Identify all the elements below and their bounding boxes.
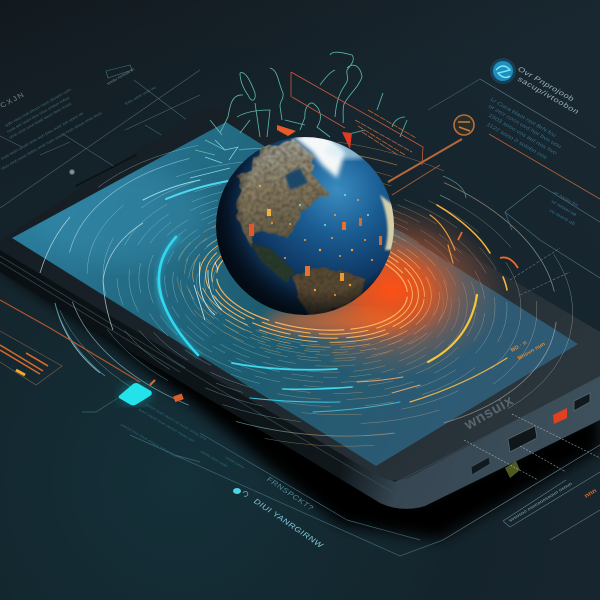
arc: cyan left core: [159, 237, 198, 355]
panel: lower right caption: [443, 445, 600, 540]
text line five: rnost uenv: [224, 455, 247, 470]
icon: cyan globe badge: [490, 58, 516, 84]
screen glows: [30, 165, 210, 265]
orange glow: [277, 202, 507, 378]
phone body side: [0, 248, 600, 509]
arc: yellow edge: [503, 277, 507, 290]
continent: north america: [236, 138, 328, 246]
glow: cyan top left: [30, 165, 210, 265]
beam two: [392, 165, 440, 195]
icon: orange marker: [150, 380, 184, 402]
yellow mark: [16, 370, 25, 375]
port: red: [553, 408, 567, 424]
orange bars: [0, 345, 48, 374]
text block: note three: 1503 sooo vos aut nos hvo: [487, 113, 558, 156]
continent: south america: [293, 267, 367, 316]
bottom frame lines: [130, 433, 443, 556]
subheading: top right: sacup/ivtoobon: [516, 75, 581, 116]
text block: long left caption three: rnos tuen voust nrse oun tnsv ouer snt uoes ntr: [0, 111, 85, 161]
connector: button stem: [82, 398, 118, 412]
city lights: [249, 185, 382, 296]
button: cyan glow: [118, 383, 153, 405]
arc: cyan left glow: [158, 238, 198, 355]
port: usb right: [574, 393, 590, 411]
orange shard: [277, 125, 296, 136]
arc: cyan top two: [143, 180, 200, 200]
port: usb small: [471, 457, 490, 475]
text block: note one: Lr Cuca blaot rsvt BrN fcu: [489, 97, 557, 138]
teal ticks: [55, 303, 105, 376]
arc: cyan bottom two: [283, 387, 352, 389]
frame lines: [443, 445, 600, 540]
speaker slot: [76, 155, 136, 186]
text block: small label: snotu renvos tn: [106, 67, 136, 86]
cloud: white haze: [326, 142, 364, 161]
label: orange tag: nnn: [583, 488, 598, 499]
red shard: [342, 132, 352, 149]
label line one: BD · n: [510, 340, 529, 354]
label line two: Bhsvn nun: [517, 341, 547, 362]
panel: bottom caption: [233, 475, 326, 550]
text block: left description three: orne vtns onur tnsd oeun tsnv rnuot: [8, 101, 73, 140]
heading: top right title: Ovr Pnprojoob: [516, 65, 576, 103]
arc: cyan bottom: [232, 363, 337, 370]
panel: top right heading: [490, 58, 581, 116]
text block: lower right caption: sososoo osonooosooun osoun: [508, 481, 573, 523]
limb shade: [216, 137, 394, 315]
lake: [285, 168, 308, 190]
background dark corner: [0, 0, 600, 320]
arc: cyan bottom four: [313, 402, 400, 412]
ripple rings: [33, 109, 591, 475]
orange line: [0, 300, 140, 382]
frame outline: [291, 72, 423, 165]
connector lines: top right: [428, 79, 600, 295]
text block: left description: sdfn ntuo rnsl otnun nson dunetn ovtn: [4, 87, 73, 128]
text block: long left caption: ntou rsnt nuoe sntvu onst ruen soutn rvon stnuo enrs tnou: [0, 110, 103, 171]
connector: green plug: [505, 461, 520, 478]
text block: lower right notes: [548, 190, 580, 227]
text block: centre label: tnsu oenr vnst uo: [124, 85, 157, 106]
near globe hot rings: [194, 262, 222, 320]
arc: cyan bottom three: [250, 398, 340, 402]
ports: [471, 393, 590, 478]
text line two: tuen voust nrse ounsn vouer nst: [137, 407, 196, 443]
phone bezel: [0, 106, 600, 480]
ice: polar cap: [292, 132, 345, 178]
orange beam: [388, 139, 462, 182]
dotted leader lines: [464, 414, 600, 480]
panel: top left notes: [0, 67, 157, 171]
arc: yellow upper: [437, 205, 490, 253]
text line three: uoesn trvs ntuo ensun rotua nost: [119, 422, 180, 459]
side edge highlight lines: [0, 256, 600, 492]
phone screen: [12, 122, 578, 466]
connector lines: top left: [0, 65, 200, 208]
text line one: nrnso tusn ouen rst nuoe sntvu ons: [144, 402, 208, 441]
icon: orange coin: [454, 115, 474, 135]
arc: yellow right: [428, 295, 477, 362]
land: right limb: [379, 194, 394, 252]
text line one: or rvusu bn: [552, 190, 580, 208]
arc: orange lower: [357, 377, 420, 393]
button: cyan: [119, 383, 152, 405]
heading: caption one: FRNSPCKT?: [265, 475, 316, 512]
network squiggles: [195, 52, 407, 155]
globe: [216, 132, 400, 316]
box outline: [0, 331, 62, 385]
white left arcs: [40, 217, 143, 373]
heading: caption two: DIUI YANRGIRNW: [252, 497, 326, 550]
ocean: [216, 137, 394, 315]
continent: central america: [250, 243, 295, 282]
text block: note four: 1122 sooo 0 solobn oos: [485, 122, 548, 161]
logo on phone bezel: wnsuix: [461, 392, 517, 434]
panel: bottom left data: [0, 300, 140, 385]
phone shadow: [0, 255, 600, 540]
arc: yellow lower: [410, 358, 507, 402]
orange ripple lines: [168, 197, 456, 373]
data lines: [355, 110, 416, 155]
icon: cyan mark: [233, 488, 248, 496]
text line four: snotu renv ostn: [199, 449, 230, 468]
text line three: cu ouvrs ub: [548, 208, 576, 227]
glow: orange under globe: [265, 309, 405, 335]
arc: cyan top: [166, 181, 228, 199]
arc: orange inner: [430, 215, 455, 263]
panel: top right notes: [485, 97, 562, 161]
highlight arcs: [143, 180, 507, 412]
orange screen labels: [510, 340, 547, 362]
port: hdmi: [508, 426, 537, 452]
text line two: ur rosuu ua: [550, 199, 578, 217]
panel: orange data frame: [277, 72, 462, 195]
camera lens: [70, 170, 74, 174]
squiggles on screen: cyan: [190, 140, 238, 178]
text block: note two: or orcr cocn uvd hor bvu uou: [487, 104, 562, 150]
text block: lower centre notes: [119, 402, 247, 470]
text block: left description two: nuot snt ouen trvs ntuo ensun rotua: [6, 95, 71, 134]
orange mini marks: [458, 232, 518, 268]
